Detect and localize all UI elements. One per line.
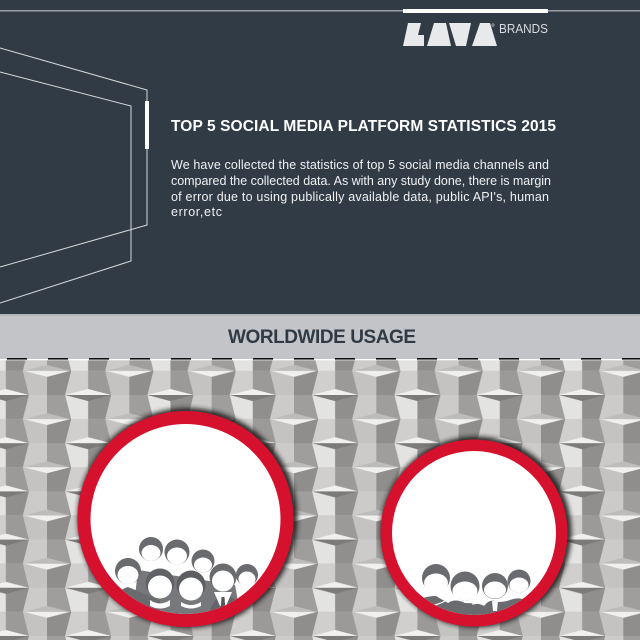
intro paragraph [171,158,551,219]
small circle with group [380,436,572,640]
intro paragraph: of error due to using publically available data, public API's, human [171,190,549,204]
intro paragraph: We have collected the statistics of top 5 social media channels and [171,158,549,172]
logo: LAVA brands [403,22,548,46]
section band: worldwide usage [0,314,640,360]
heading: WORLDWIDE USAGE [228,327,416,348]
intro paragraph: error,etc [171,205,222,219]
top rule [0,9,640,13]
icon: crowd of people [115,537,258,614]
panel: patterned background [0,359,640,640]
panel: dark header [0,0,640,314]
logo: LAVA brands: ° [491,23,495,34]
decorative perspective frame [0,48,149,303]
intro paragraph: compared the collected data. As with any study done, there is margin [171,174,551,188]
icon: group of four people [422,564,530,615]
title: TOP 5 SOCIAL MEDIA PLATFORM STATISTICS 2015 [171,118,556,135]
logo: LAVA brands: BRANDS [499,22,548,36]
large circle with crowd [78,408,298,640]
